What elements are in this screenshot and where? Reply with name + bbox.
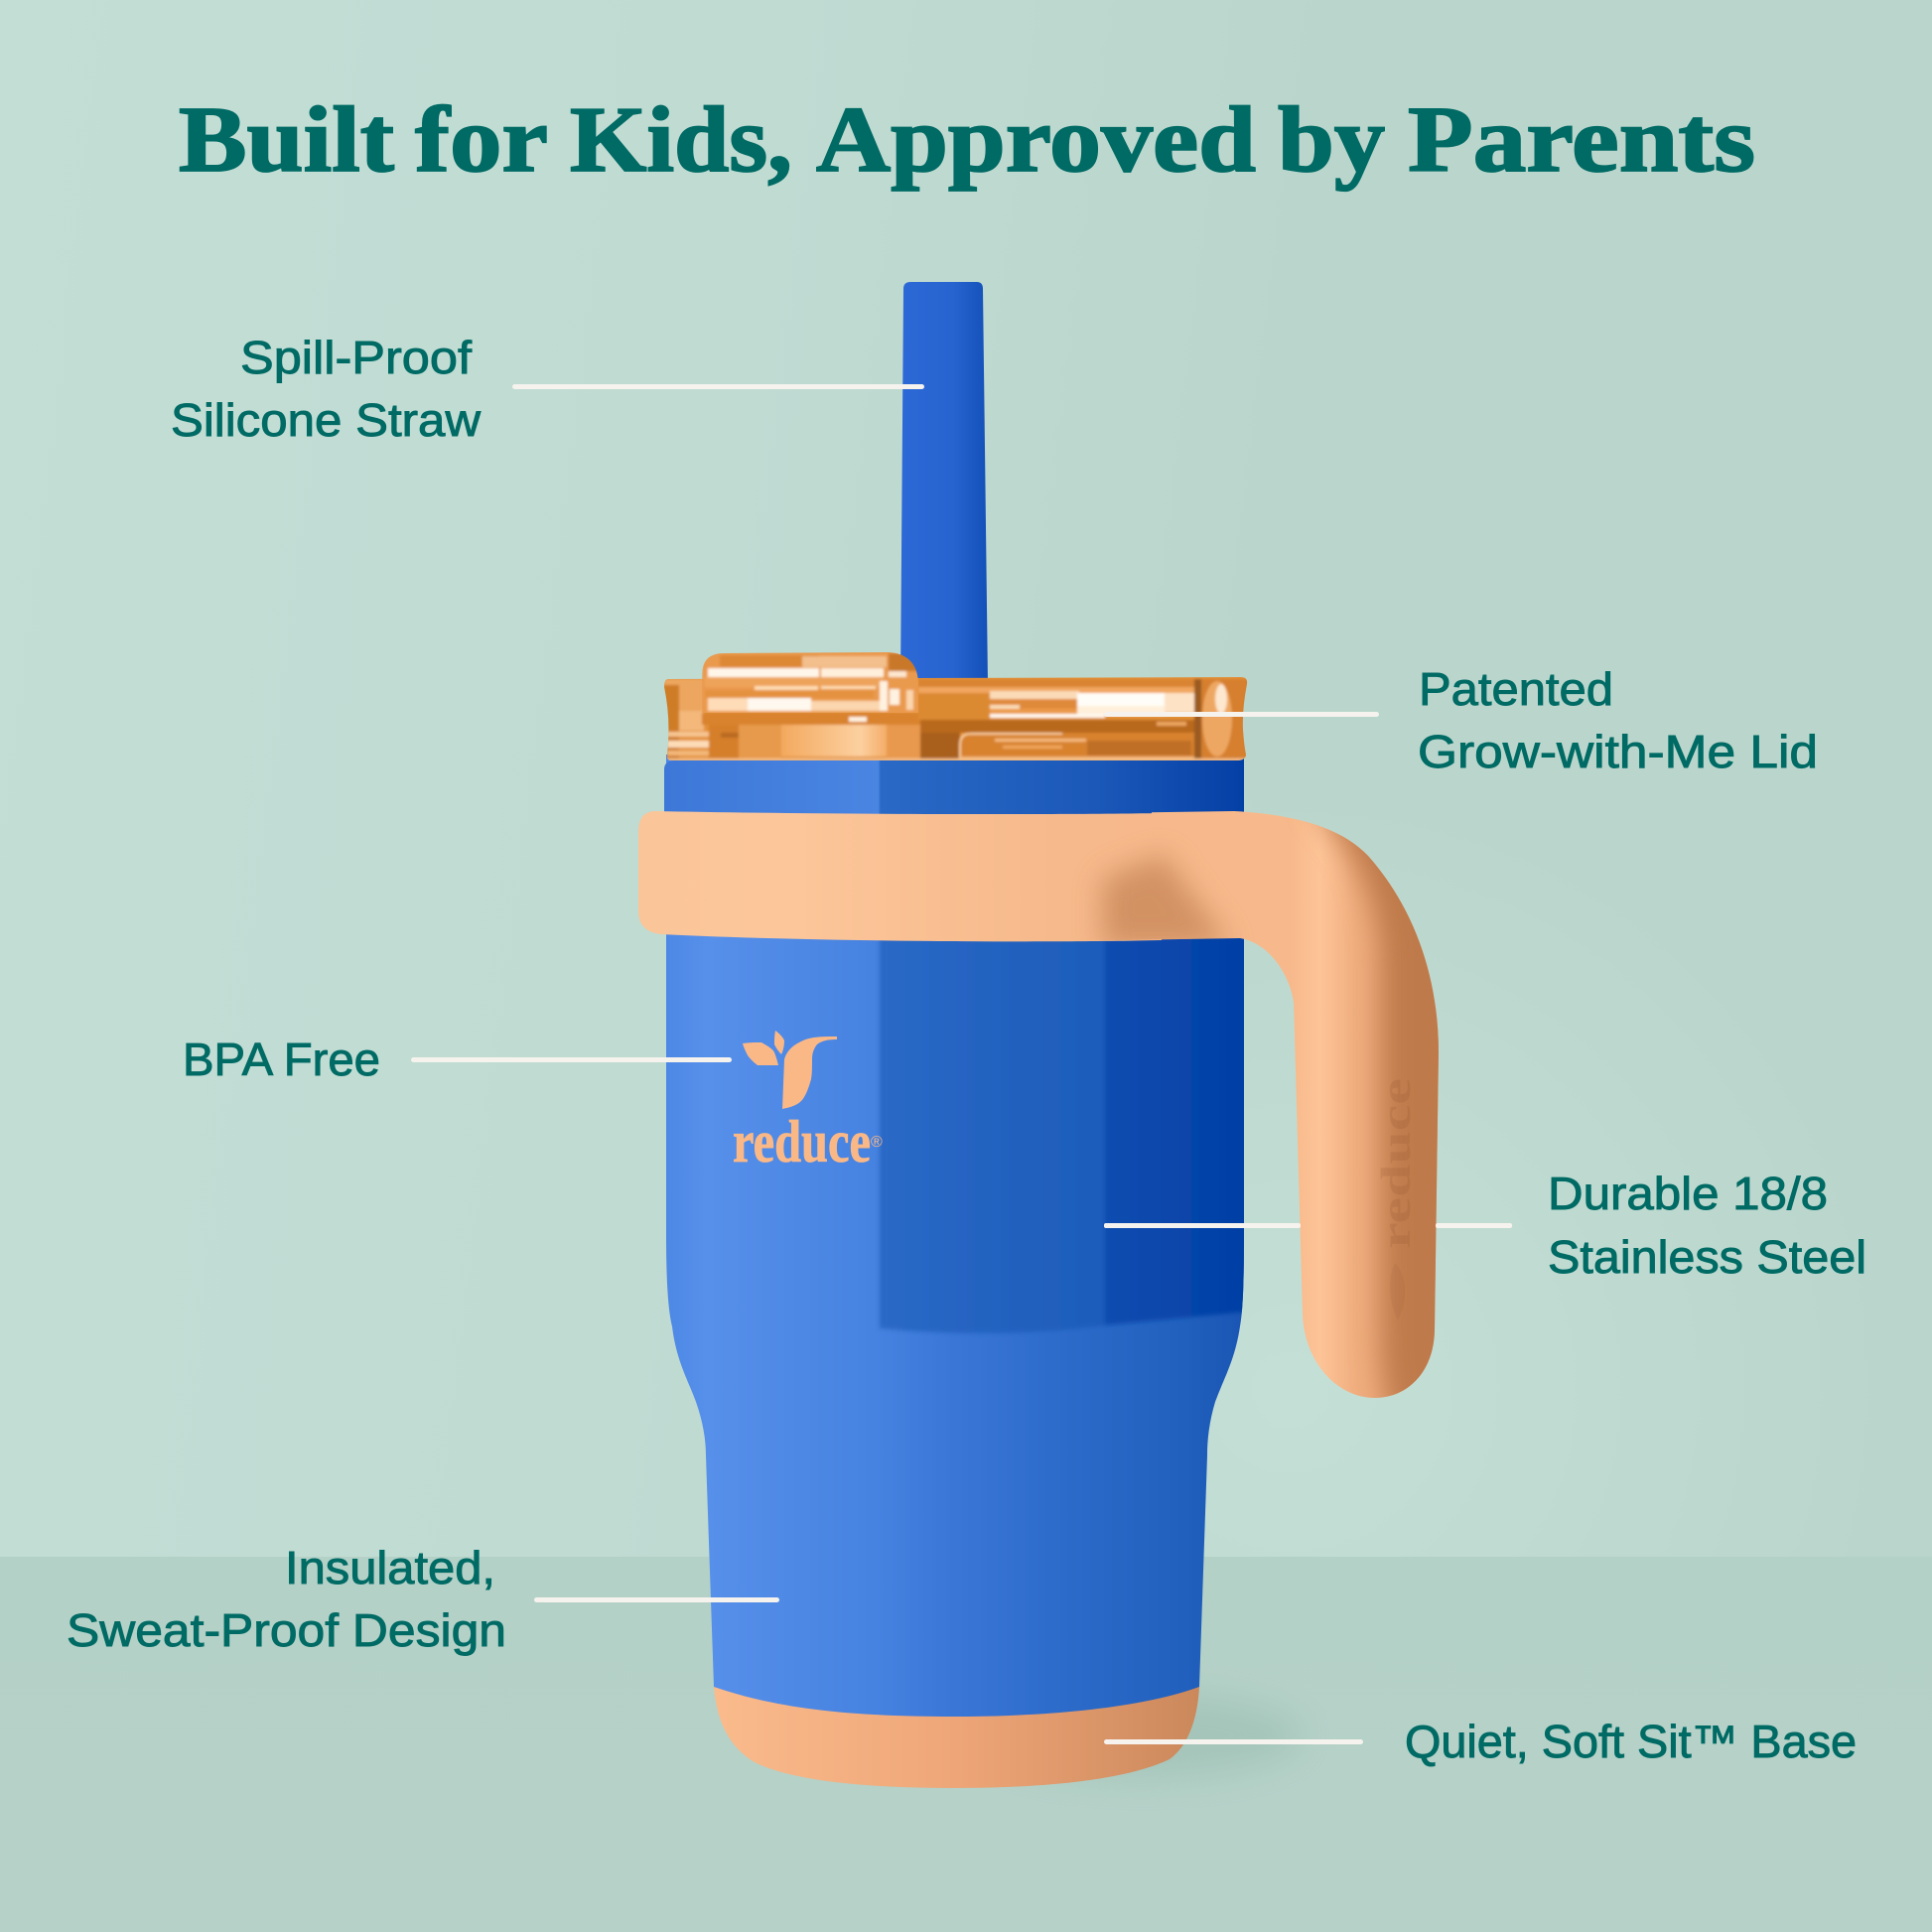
callout: stainless steel bbox=[1104, 1168, 1866, 1283]
floor shadow bbox=[983, 1694, 1301, 1777]
logo: reduce brand mark bbox=[733, 1031, 883, 1174]
callout: spill-proof straw: Spill-Proof bbox=[240, 332, 472, 383]
callout: spill-proof straw: Silicone Straw bbox=[171, 394, 482, 446]
tumbler body bbox=[666, 755, 1244, 1717]
title bbox=[179, 88, 1755, 192]
floor bbox=[0, 1557, 1932, 1932]
product: tumbler illustration bbox=[638, 282, 1479, 1788]
title: Approved bbox=[816, 88, 1256, 192]
silicone band bbox=[638, 811, 1162, 941]
callout: quiet base bbox=[1104, 1716, 1857, 1767]
callout: quiet base: Quiet, Soft Sit™ Base bbox=[1405, 1716, 1857, 1767]
lid rim bbox=[664, 677, 1247, 760]
handle with crease bbox=[1090, 811, 1439, 1398]
straw bbox=[900, 282, 988, 685]
callout: BPA free bbox=[183, 1034, 732, 1085]
embossed wordmark on handle: reduce bbox=[1374, 1078, 1420, 1249]
callout: stainless steel: Stainless Steel bbox=[1548, 1231, 1866, 1283]
title: by bbox=[1278, 88, 1385, 192]
callout: patented lid: Grow-with-Me Lid bbox=[1418, 726, 1818, 777]
callout: insulated design: Insulated, bbox=[285, 1542, 495, 1593]
callout: BPA free: BPA Free bbox=[183, 1034, 380, 1085]
leaf mark bbox=[743, 1031, 837, 1109]
title: Parents bbox=[1408, 88, 1755, 192]
registered mark: ® bbox=[871, 1134, 883, 1151]
lid flip tab bbox=[702, 650, 920, 715]
callout: spill-proof straw bbox=[171, 332, 924, 446]
callout: patented lid: Patented bbox=[1419, 663, 1613, 715]
title: Kids, bbox=[570, 88, 792, 192]
title: Built bbox=[179, 88, 394, 192]
silicone base bbox=[714, 1687, 1199, 1788]
callout: stainless steel: Durable 18/8 bbox=[1548, 1168, 1828, 1219]
callout: insulated design bbox=[67, 1542, 779, 1656]
lid collar bbox=[664, 760, 1242, 824]
title: for bbox=[415, 88, 548, 192]
embossed wordmark on handle bbox=[1374, 1078, 1420, 1320]
wordmark: reduce bbox=[733, 1109, 871, 1174]
callout: insulated design: Sweat-Proof Design bbox=[67, 1604, 506, 1656]
lid bbox=[655, 650, 1261, 764]
callout: patented lid bbox=[1104, 663, 1818, 777]
